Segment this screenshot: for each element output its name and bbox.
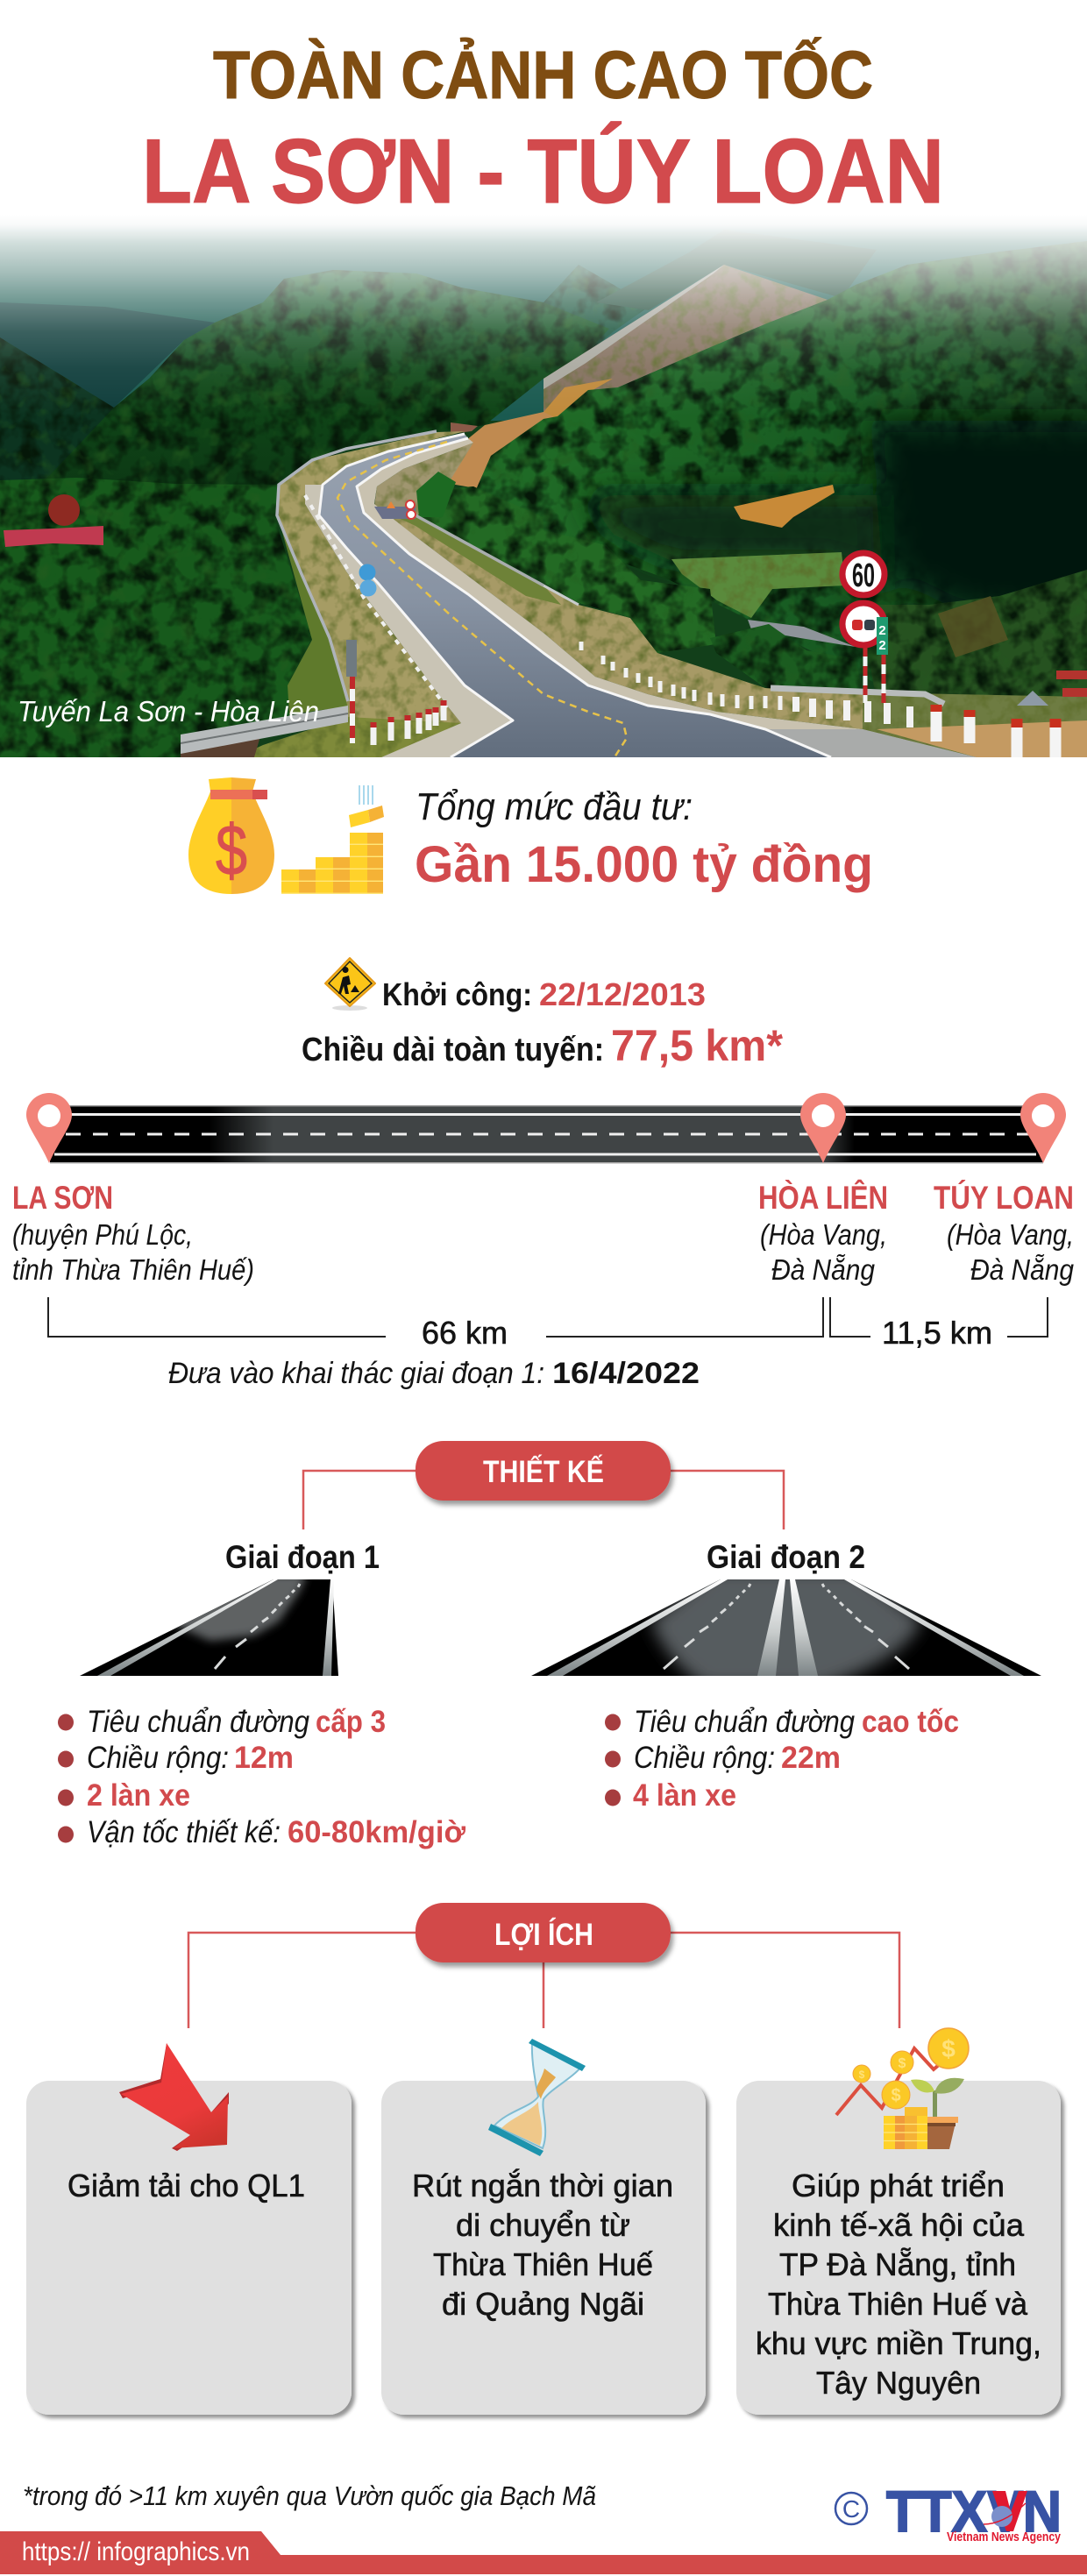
far road bend (748, 620, 856, 647)
roadside shrine (1056, 671, 1087, 697)
dirt slope (544, 265, 828, 419)
investment block (188, 777, 873, 894)
dark forest base (579, 421, 1087, 622)
title line 2: LA SƠN - TÚY LOAN (142, 121, 944, 223)
lower right ground (863, 692, 1087, 757)
left hill (35, 270, 609, 491)
road surface (319, 434, 831, 757)
traffic signs: 60 (852, 557, 875, 594)
icon: hourglass (488, 2039, 586, 2156)
groundbreaking date: Khởi công: (382, 976, 532, 1012)
footer bar (0, 2531, 1087, 2574)
route road strip with pins (26, 1093, 1066, 1164)
card: economic development: khu vực miền Trung, (756, 2325, 1041, 2361)
card: economic development: Tây Nguyên (816, 2365, 981, 2401)
spec list: phase 1: 2 làn xe (87, 1778, 190, 1813)
bright bushes (416, 486, 716, 653)
lower right bushes (859, 570, 1087, 701)
footer url: https:// infographics.vn (22, 2537, 250, 2566)
spec list: phase 2: 4 làn xe (633, 1778, 736, 1813)
logo: TTXVN: Vietnam News Agency (947, 2530, 1062, 2544)
spec list: phase 1: Chiều rộng: (87, 1741, 229, 1775)
groundbreaking date: 22/12/2013 (539, 976, 706, 1012)
guard rails (277, 431, 437, 701)
card: economic development: TP Đà Nẵng, tỉnh (779, 2246, 1016, 2282)
distance brackets (48, 1297, 1048, 1351)
heading pill: Thiết kế (416, 1441, 671, 1501)
icon: down arrow (119, 2043, 229, 2151)
grass field (671, 552, 845, 618)
spec list: phase 2: Chiều rộng: (634, 1741, 775, 1775)
location: Túy Loan (934, 1179, 1075, 1286)
spec list: phase 2: cao tốc (862, 1705, 959, 1739)
phase 1 heading: Giai đoạn 1 (225, 1539, 380, 1575)
roadside posts (305, 495, 447, 708)
heading pill: Thiết kế: THIẾT KẾ (483, 1454, 604, 1489)
spec list: phase 1: Vận tốc thiết kế: (87, 1815, 281, 1849)
spec list: phase 1 (58, 1705, 465, 1849)
card: shorten travel time: di chuyển từ (456, 2207, 630, 2243)
right verge (374, 507, 863, 729)
pin: Hòa Liên (800, 1093, 846, 1163)
location: La Sơn: LA SƠN (12, 1180, 113, 1216)
card: economic development: kinh tế-xã hội của (773, 2207, 1025, 2243)
card: shorten travel time: đi Quảng Ngãi (442, 2286, 644, 2322)
heading pill: Lợi ích (416, 1903, 671, 1962)
card: shorten travel time: Rút ngắn thời gian (412, 2168, 673, 2203)
title line 1: TOÀN CẢNH CAO TỐC (213, 37, 873, 113)
road perspective: phase 1 (80, 1573, 338, 1676)
section: design (58, 1441, 1041, 1849)
section: benefits (26, 1903, 1061, 2415)
phase 2 heading: Giai đoạn 2 (707, 1539, 865, 1575)
card: economic development: Giúp phát triển (792, 2168, 1005, 2203)
icon: money bag: $ (216, 811, 247, 891)
logo: TTXVN: TTXVN (886, 2479, 1062, 2544)
distance: 66 km: 66 km (422, 1315, 508, 1351)
icon: road works sign (325, 958, 375, 1011)
photo caption: Tuyến La Sơn - Hòa Liên (18, 695, 319, 727)
traffic signs (842, 553, 888, 703)
location: Hòa Liên: HÒA LIÊN (758, 1179, 888, 1216)
spec list: phase 1: 60-80km/giờ (288, 1815, 465, 1849)
location: La Sơn (12, 1180, 254, 1286)
location: La Sơn: tỉnh Thừa Thiên Huế) (12, 1253, 254, 1286)
road strip (50, 1105, 1043, 1164)
icon: money plant: $ (859, 2069, 865, 2081)
card: economic development: Thừa Thiên Huế và (768, 2286, 1028, 2322)
groundbreaking date (325, 958, 706, 1012)
connector lines (303, 1471, 784, 1529)
location: La Sơn: (huyện Phú Lộc, (12, 1218, 193, 1251)
title (142, 37, 944, 223)
investment label: Tổng mức đầu tư: (416, 785, 693, 828)
spec list: phase 2: 22m (781, 1741, 841, 1775)
shoulders (305, 485, 517, 757)
spec list: phase 1: cấp 3 (316, 1705, 386, 1739)
pin: La Sơn (26, 1093, 72, 1163)
total length: 77,5 km* (611, 1021, 784, 1070)
footnote: *trong đó >11 km xuyên qua Vườn quốc gia Bạch Mã (23, 2480, 596, 2511)
spec list: phase 2: Tiêu chuẩn đường (634, 1705, 855, 1739)
road perspective: phase 2 (531, 1579, 1041, 1676)
left verge (279, 431, 465, 723)
spec list: phase 1: Tiêu chuẩn đường (87, 1705, 309, 1739)
location: Hòa Liên: Đà Nẵng (771, 1253, 876, 1286)
location: Hòa Liên (758, 1179, 888, 1286)
spec list: phase 2 (605, 1705, 959, 1813)
card: reduce load: Giảm tải cho QL1 (67, 2168, 305, 2203)
pin: Túy Loan (1020, 1093, 1066, 1163)
card: shorten travel time (381, 2081, 706, 2415)
total length (302, 1021, 784, 1070)
right hill (472, 241, 1087, 684)
opening date: 16/4/2022 (552, 1357, 700, 1390)
distance: 11,5 km: 11,5 km (882, 1315, 992, 1351)
heading pill: Lợi ích: LỢI ÍCH (494, 1917, 593, 1952)
location: Hòa Liên: (Hòa Vang, (760, 1218, 887, 1251)
icon: money plant: $ (891, 2086, 901, 2105)
icon: coin stacks (281, 785, 384, 894)
icon: money plant (836, 2028, 969, 2149)
spec list: phase 1: 12m (234, 1741, 294, 1775)
traffic signs: 2 (878, 623, 886, 638)
total length: Chiều dài toàn tuyến: (302, 1032, 604, 1068)
icon: money plant: $ (941, 2035, 956, 2062)
logo: TTXVN: C (842, 2495, 860, 2523)
photo: highway through forested hills (0, 215, 1087, 757)
traffic signs: 2 (878, 638, 886, 653)
road edge lines (319, 434, 513, 757)
location: Túy Loan: Đà Nẵng (970, 1253, 1075, 1286)
icon: money plant: $ (899, 2056, 906, 2071)
opening date: Đưa vào khai thác giai đoạn 1: (168, 1357, 544, 1390)
card: economic development (736, 2081, 1061, 2415)
left trees (0, 478, 339, 757)
investment value: Gần 15.000 tỷ đồng (415, 836, 873, 893)
icon: money bag (188, 777, 274, 894)
card: reduce load (26, 2081, 352, 2415)
card: shorten travel time: Thừa Thiên Huế (433, 2246, 653, 2282)
connector lines (188, 1933, 899, 2028)
